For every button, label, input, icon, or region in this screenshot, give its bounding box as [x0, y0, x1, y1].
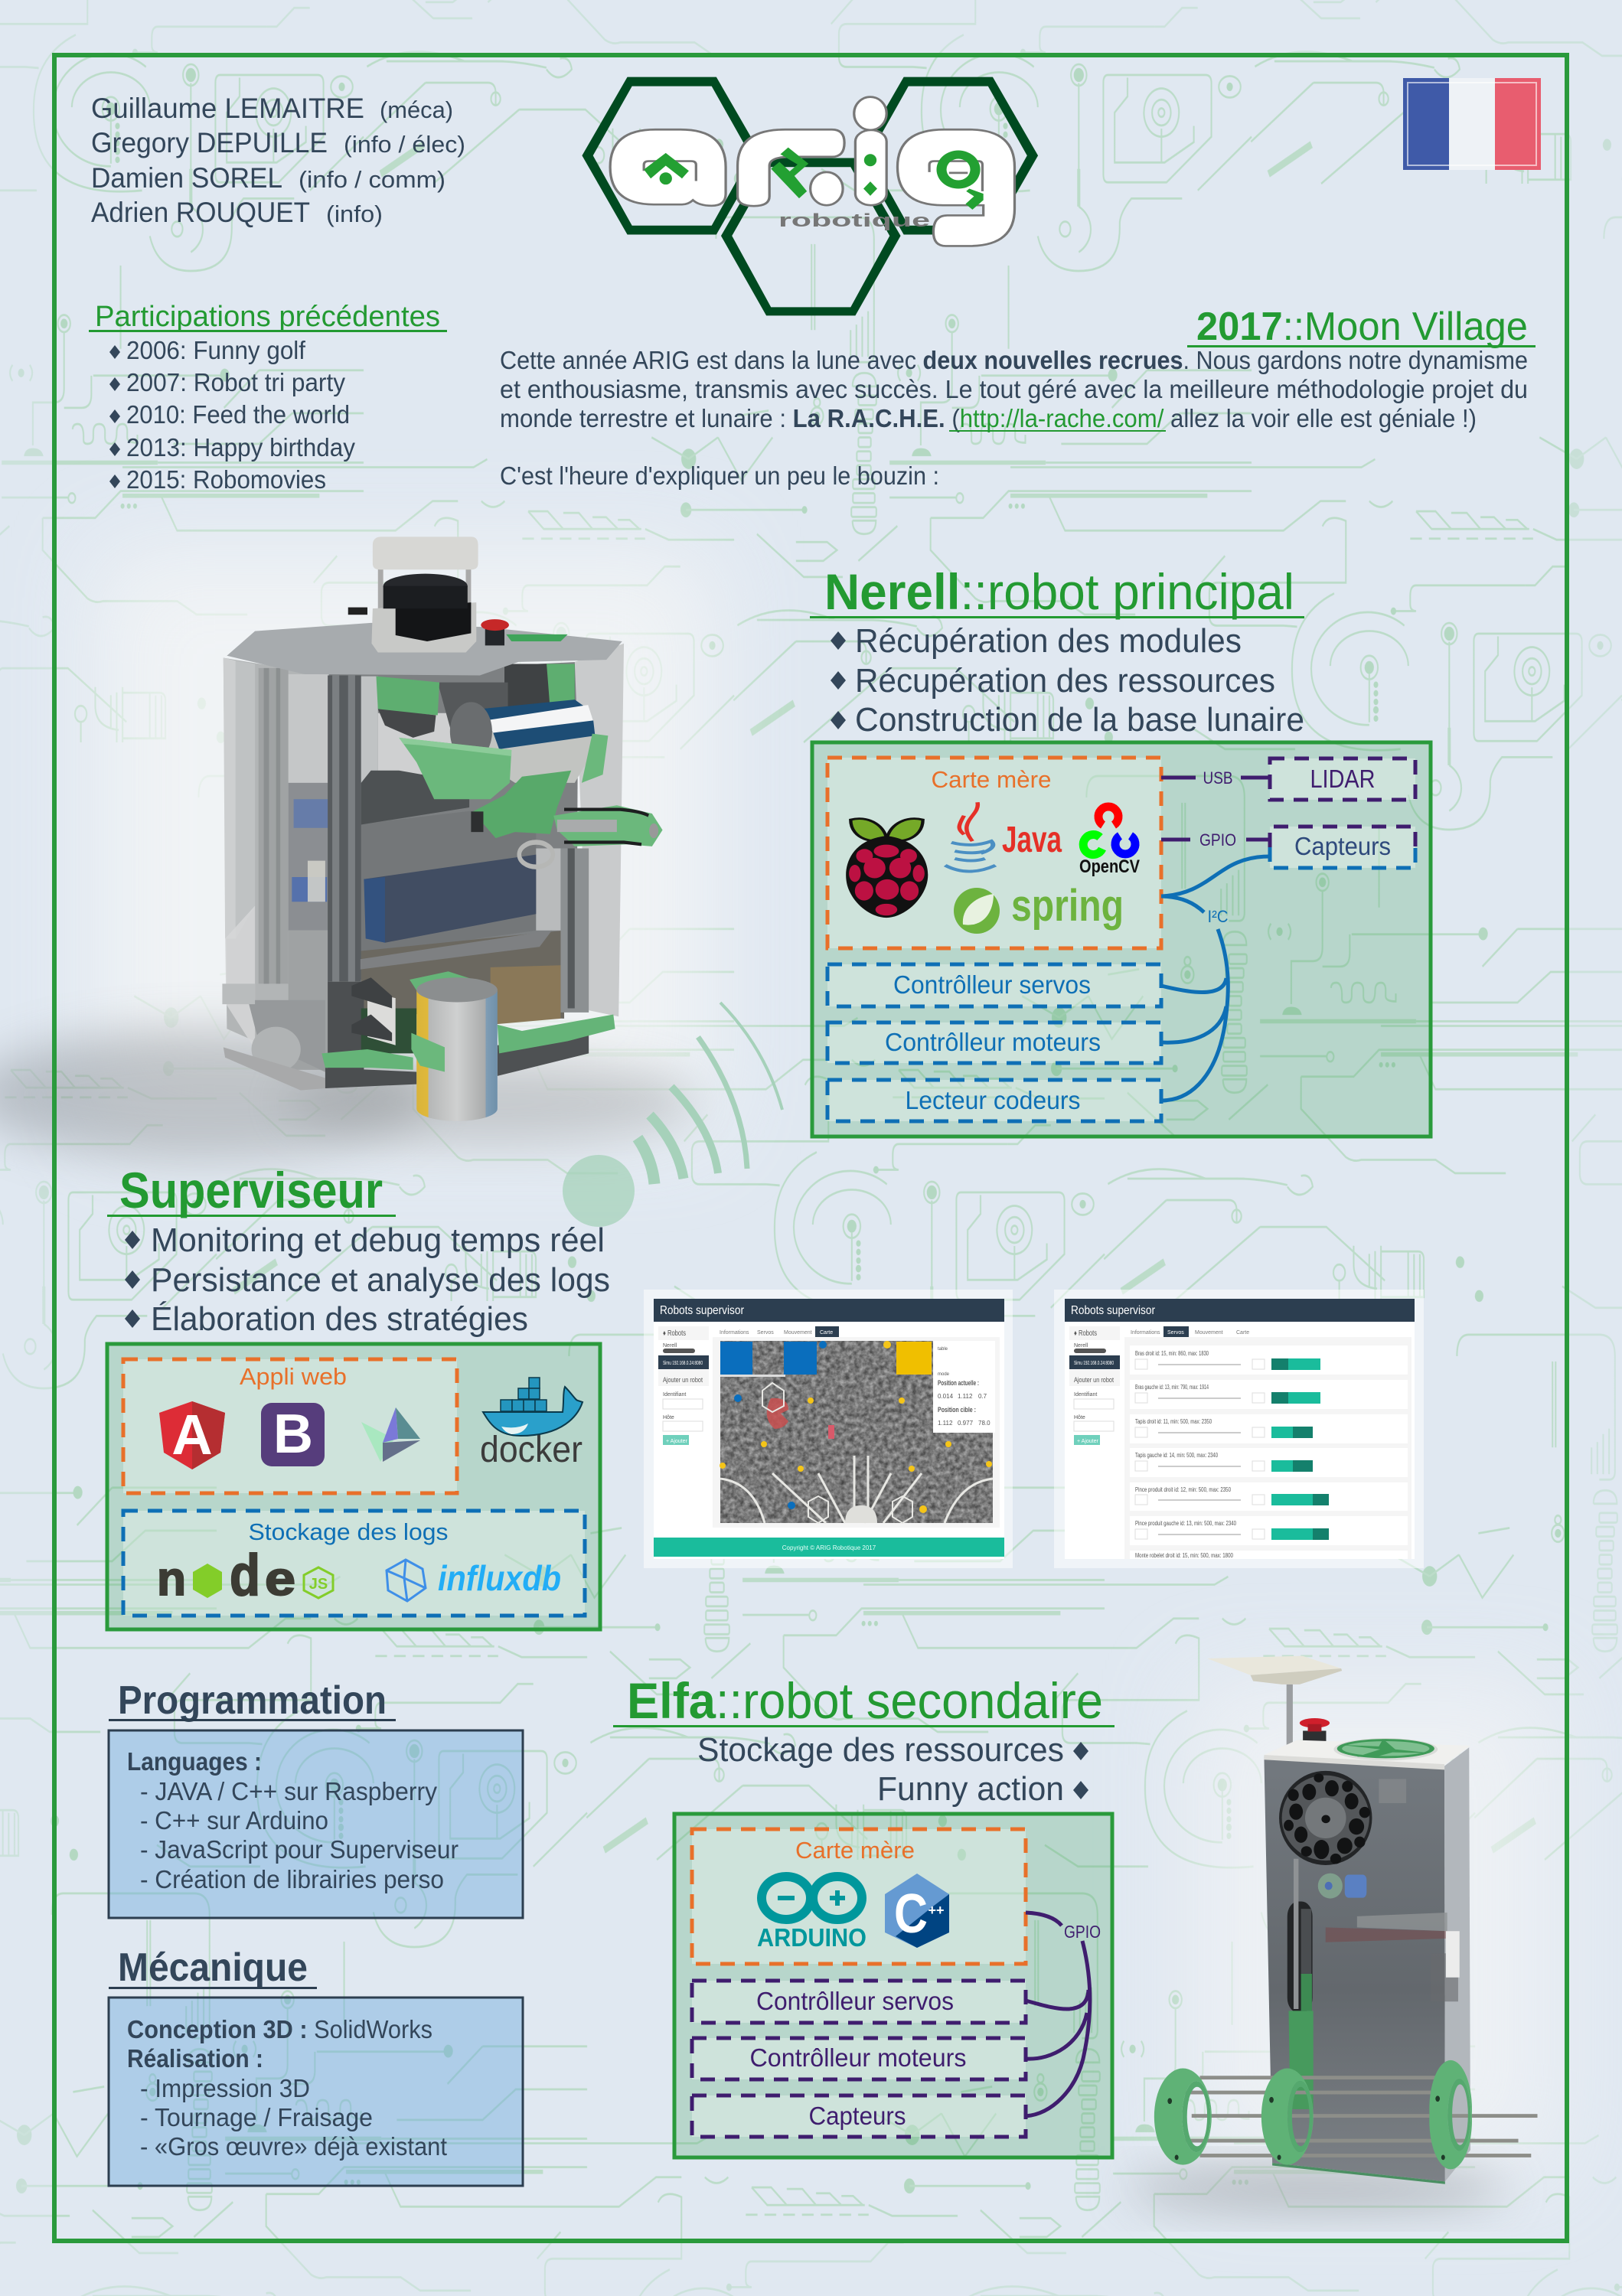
logo letters: [610, 97, 1014, 246]
panel: programming: - Création de librairies perso: [140, 1865, 444, 1893]
box: main board: Carte mère: [931, 766, 1052, 793]
panel: mechanics: - «Gros œuvre» déjà existant: [140, 2132, 447, 2161]
box: servo controller: Contrôlleur servos: [893, 970, 1091, 999]
icon: InfluxDB: [387, 1558, 561, 1601]
intro paragraph: monde terrestre et lunaire : La R.A.C.H.E. (http://la-rache.com/ allez la voir elle est géniale !): [500, 404, 1477, 432]
sidebar: Ajouter un robot: [1074, 1376, 1114, 1384]
panel: programming: [109, 1730, 523, 1918]
logo hexagons: [582, 77, 1038, 315]
box: encoder reader: [827, 1080, 1161, 1121]
connectors: GPIO bus: GPIO: [1064, 1922, 1101, 1942]
icon: Arduino: [757, 1877, 866, 1952]
green motor bracket: [376, 677, 439, 715]
sidebar: Nerell: [1074, 1343, 1088, 1349]
map info panel: table: [938, 1347, 948, 1352]
map info panel: 0.977: [958, 1420, 974, 1427]
app footer: Copyright © ARIG Robotique 2017: [782, 1544, 876, 1551]
icon: C++: C: [894, 1883, 928, 1945]
sidebar: Ajouter un robot: [663, 1376, 703, 1384]
list: previous participations: 2006: Funny golf: [126, 336, 306, 364]
box: main board: [827, 758, 1161, 948]
heading: previous participations: Participations précédentes: [95, 301, 440, 333]
lower chassis plates: [498, 1033, 589, 1076]
connectors: USB and GPIO: USB: [1203, 768, 1232, 788]
icon: Node.js: [157, 1543, 333, 1608]
servo rows: Monte robelet droit id: 15, min: 500, max: 1800: [1135, 1552, 1233, 1559]
panel: programming: - JavaScript pour Superviseur: [140, 1835, 459, 1864]
connectors: I2C bus: [1161, 856, 1270, 1101]
tabs: [720, 1326, 839, 1337]
icon: Arduino: ARDUINO: [757, 1923, 866, 1952]
icon: Raspberry Pi: [846, 819, 928, 918]
box: motor controller: Contrôlleur moteurs: [750, 2043, 966, 2072]
sidebar: [1069, 1326, 1120, 1450]
panel: programming: Languages :: [127, 1747, 262, 1776]
sensor lenses: [1318, 1874, 1366, 1899]
box: LIDAR: LIDAR: [1310, 765, 1375, 793]
connectors: USB and GPIO: [1161, 768, 1270, 850]
heading: Elfa: Elfa::robot secondaire: [627, 1672, 1103, 1729]
green wheel rings: [1154, 2060, 1472, 2169]
box: motor controller: [827, 1022, 1161, 1063]
servo rows: Tapis gauche id: 14, min: 500, max: 2340: [1135, 1452, 1218, 1459]
tabs: Carte: [820, 1330, 833, 1336]
box: sensors: [692, 2095, 1026, 2137]
map info panel: 78.0: [978, 1420, 990, 1427]
blue and white cylinder: [450, 700, 595, 783]
map info panel: mode: [938, 1372, 950, 1377]
sidebar: Simu 192.168.0.24:8080: [1074, 1361, 1114, 1366]
icon: Bootstrap: B: [273, 1404, 313, 1465]
sidebar: Identifiant: [663, 1392, 686, 1397]
tabs: Servos: [757, 1330, 774, 1336]
robot top plate: [227, 623, 622, 675]
icon: OpenCV: [1079, 807, 1140, 877]
box: sensors: [1270, 827, 1415, 868]
team members: (méca): [380, 96, 453, 123]
green arms: [321, 1049, 413, 1070]
logo: ARIG robotique: [582, 77, 1038, 315]
box: servo controller: [692, 1981, 1026, 2023]
gray storage cup: [416, 977, 498, 1121]
lidar: [348, 536, 478, 652]
map info panel: 0.014: [938, 1393, 954, 1400]
icon: OpenCV: OpenCV: [1079, 856, 1140, 877]
servo rows: Bras gauche id: 13, min: 790, max: 1914: [1135, 1384, 1209, 1391]
icon: Bootstrap: [261, 1403, 325, 1466]
sidebar: + Ajouter: [1077, 1439, 1098, 1444]
icon: Spring: spring: [1011, 881, 1124, 931]
icon: Node.js: JS: [309, 1576, 328, 1593]
box: encoder reader: Lecteur codeurs: [905, 1086, 1081, 1114]
screenshot: supervisor servos view: [1054, 1290, 1424, 1568]
icon: Node.js: d: [230, 1543, 260, 1608]
box: motor controller: Contrôlleur moteurs: [885, 1028, 1101, 1056]
icon: Docker: [480, 1378, 583, 1470]
team members: [91, 93, 465, 228]
intro paragraph: [500, 346, 1528, 490]
icon: Node.js: e: [265, 1553, 295, 1606]
icon: Node.js: n: [157, 1553, 186, 1606]
map info panel: Position cible :: [938, 1406, 976, 1414]
icon: wifi signal arcs: [563, 1003, 782, 1227]
panel: mechanics: - Tournage / Fraisage: [140, 2103, 373, 2131]
tabs: Informations: [720, 1330, 749, 1336]
ammo barrel: [1279, 1771, 1372, 1865]
sidebar: + Ajouter: [666, 1439, 687, 1444]
sidebar: Hôte: [1074, 1415, 1085, 1420]
team members: (info / comm): [299, 166, 445, 193]
map info panel: Position actuelle :: [938, 1379, 979, 1387]
map info panel: 1.112: [958, 1393, 973, 1400]
heading: Mécanique: Mécanique: [118, 1945, 308, 1990]
heading: 2017 Moon Village: 2017::Moon Village: [1196, 305, 1528, 349]
list: Nerell functions: [831, 622, 1304, 739]
rods: [1182, 2076, 1538, 2157]
icon: French flag: [1403, 78, 1541, 170]
gripper blocks: [367, 992, 396, 1045]
list: Nerell functions: Récupération des ressources: [855, 662, 1275, 700]
heading: Nerell: Nerell::robot principal: [824, 563, 1294, 620]
icon: InfluxDB: influxdb: [438, 1558, 561, 1598]
tabs: Carte: [1236, 1330, 1249, 1336]
servo rows: Pince produit droit id: 12, min: 500, max: 2350: [1135, 1486, 1231, 1493]
servo rows: Tapis droit id: 11, min: 500, max: 2350: [1135, 1418, 1212, 1425]
team members: (info): [326, 201, 383, 227]
list: previous participations: 2015: Robomovies: [126, 465, 326, 494]
list: Nerell functions: Construction de la base lunaire: [855, 701, 1304, 739]
list: supervisor functions: Persistance et analyse des logs: [151, 1261, 610, 1299]
tabs: Servos: [1167, 1330, 1184, 1336]
box: log storage: Stockage des logs: [248, 1518, 449, 1545]
icon: Angular: [159, 1401, 225, 1469]
sidebar: Identifiant: [1074, 1392, 1097, 1397]
list: supervisor functions: [125, 1221, 610, 1338]
icon: Java: [945, 802, 1062, 872]
panel: mechanics: Réalisation :: [127, 2044, 263, 2073]
heading: Superviseur: Superviseur: [119, 1162, 383, 1218]
list: supervisor functions: Monitoring et debug temps réel: [151, 1221, 605, 1259]
list: Nerell functions: Récupération des modules: [855, 622, 1242, 660]
icon: C++: [885, 1874, 949, 1948]
map info panel: 0.7: [978, 1393, 987, 1400]
box: servo controller: Contrôlleur servos: [756, 1987, 954, 2015]
heading: Programmation: Programmation: [118, 1678, 387, 1723]
panel: mechanics: Conception 3D : SolidWorks: [127, 2015, 432, 2043]
box: LIDAR: [1270, 758, 1415, 800]
connectors: GPIO bus: [1026, 1913, 1101, 2116]
box: servo controller: [827, 964, 1161, 1006]
connectors: USB and GPIO: GPIO: [1199, 830, 1236, 850]
icon: prism logo: [361, 1407, 420, 1462]
box: web app: Appli web: [240, 1363, 347, 1390]
logo subtitle: robotique: [778, 210, 930, 231]
servo rows: Pince produit gauche id: 13, min: 500, max: 2340: [1135, 1520, 1236, 1527]
team members: Guillaume LEMAITRE: [91, 93, 364, 124]
robot body: [1264, 1740, 1470, 2184]
app header: [654, 1299, 1004, 1322]
servo rows: Bras droit id: 15, min: 860, max: 1830: [1135, 1350, 1209, 1357]
sidebar: ♦ Robots: [663, 1329, 686, 1338]
icon: Docker: docker: [480, 1430, 583, 1470]
green arm and chain: [553, 805, 663, 846]
icon: Java: Java: [1002, 820, 1062, 860]
map info panel: 1.112: [938, 1420, 953, 1427]
sidebar: [658, 1326, 709, 1450]
team members: Gregory DEPUILLE: [91, 127, 328, 158]
intro paragraph: et enthousiasme, transmis avec succès. Le tout géré avec la meilleure méthodologie projet du: [500, 375, 1528, 403]
app header: Robots supervisor: [660, 1304, 745, 1317]
emergency button: [1300, 1718, 1330, 1745]
list: previous participations: [109, 336, 355, 494]
sidebar: ♦ Robots: [1074, 1329, 1097, 1338]
list: previous participations: 2007: Robot tri party: [126, 368, 345, 396]
box: main board: [692, 1829, 1026, 1964]
box: main board: Carte mère: [795, 1837, 915, 1864]
box: web app: [123, 1359, 457, 1493]
icon: C++: ++: [928, 1903, 945, 1918]
icon: Spring: [954, 881, 1124, 934]
sidebar: Simu 192.168.0.24:8080: [663, 1361, 703, 1366]
emergency button: [481, 619, 509, 645]
list: supervisor functions: Élaboration des stratégies: [151, 1300, 528, 1338]
tabs: [1131, 1326, 1249, 1337]
tabs: Mouvement: [1195, 1330, 1223, 1336]
panel: mechanics: [109, 1998, 523, 2186]
green funnel: [399, 738, 511, 799]
green fan: [1333, 1738, 1438, 1760]
screenshot: supervisor map view: [644, 1290, 1013, 1568]
box: sensors: Capteurs: [808, 2102, 906, 2130]
panel: Nerell architecture: [812, 742, 1431, 1137]
list: Elfa functions: Funny action: [877, 1770, 1064, 1808]
team members: Adrien ROUQUET: [91, 197, 310, 228]
app header: [1065, 1299, 1415, 1322]
panel: Elfa architecture: [674, 1814, 1112, 2157]
team members: Damien SOREL: [91, 162, 282, 194]
sidebar: Hôte: [663, 1415, 674, 1420]
slot and green guide: [1287, 1859, 1314, 2109]
illustration: Elfa secondary robot: [1154, 1656, 1538, 2184]
panel: programming: - C++ sur Arduino: [140, 1806, 328, 1835]
servo rows: [1130, 1345, 1408, 1559]
antenna plate: [1207, 1656, 1342, 1755]
list: Elfa functions: [697, 1731, 1088, 1808]
team members: (info / élec): [344, 131, 465, 158]
panel: mechanics: - Impression 3D: [140, 2074, 310, 2102]
box: sensors: Capteurs: [1294, 832, 1391, 860]
list: previous participations: 2013: Happy birthday: [126, 433, 355, 461]
panel: supervisor stack: [107, 1344, 600, 1629]
intro paragraph: Cette année ARIG est dans la lune avec deux nouvelles recrues. Nous gardons notre dynamisme: [500, 346, 1528, 374]
box: log storage: [123, 1511, 585, 1616]
list: previous participations: 2010: Feed the world: [126, 400, 350, 429]
box: motor controller: [692, 2038, 1026, 2079]
app footer: [654, 1538, 1004, 1557]
intro paragraph: C'est l'heure d'expliquer un peu le bouzin :: [500, 461, 939, 490]
soft glows and shadows behind the robots: [0, 551, 1554, 2210]
sidebar: Nerell: [663, 1343, 677, 1349]
tabs: Informations: [1131, 1330, 1160, 1336]
map info panel: [933, 1341, 995, 1433]
app header: Robots supervisor: [1071, 1304, 1156, 1317]
icon: Angular: A: [171, 1403, 213, 1466]
panel: programming: - JAVA / C++ sur Raspberry: [140, 1777, 437, 1805]
list: Elfa functions: Stockage des ressources: [697, 1731, 1064, 1769]
logo green glyph marks: [644, 148, 984, 210]
tabs: Mouvement: [784, 1330, 812, 1336]
illustration: Nerell main robot: [222, 536, 663, 1121]
connectors: I2C bus: I²C: [1208, 907, 1229, 926]
moon map: [720, 1341, 995, 1523]
